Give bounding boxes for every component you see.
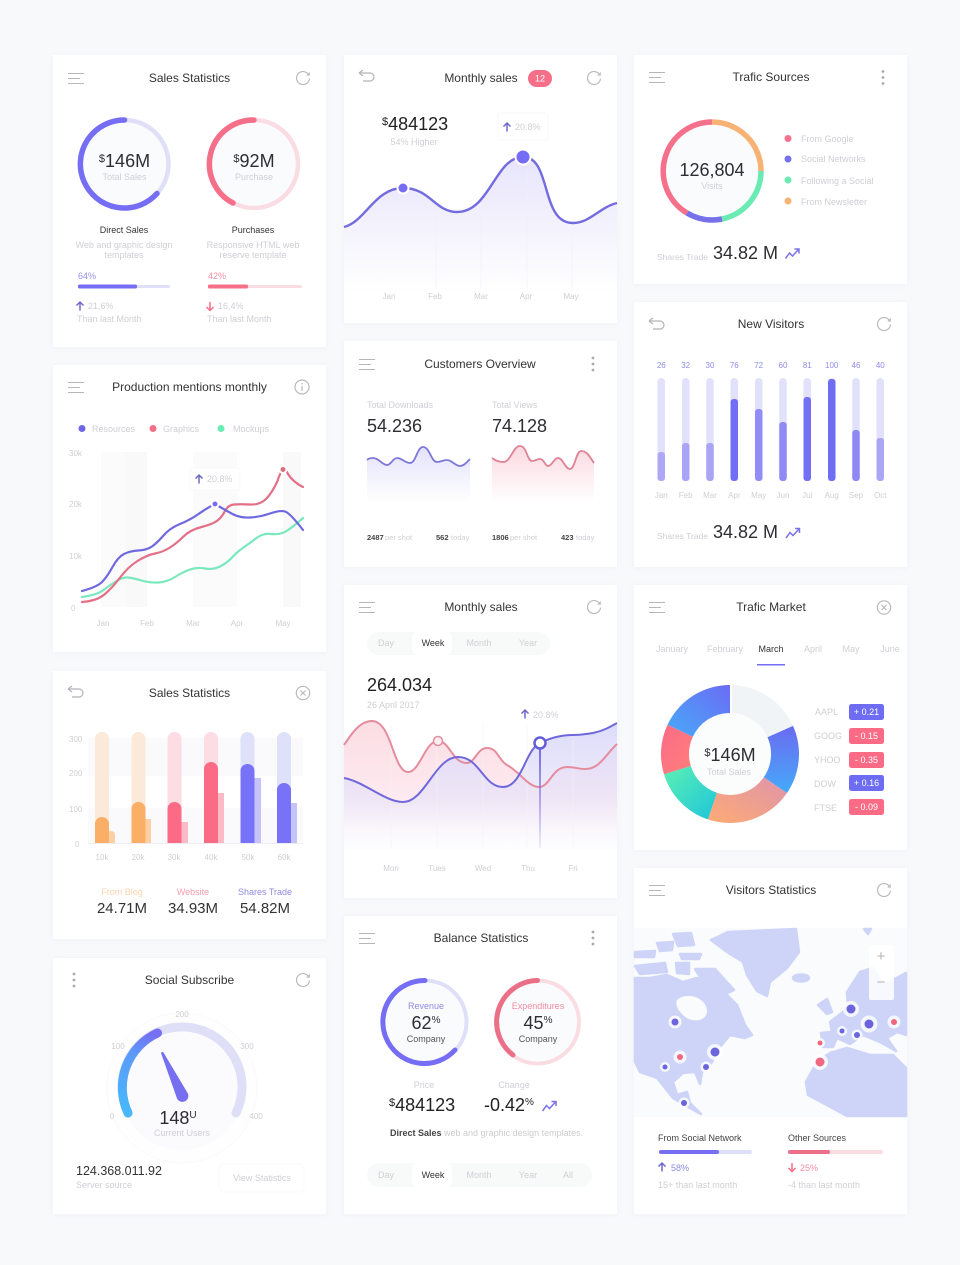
stat: other sources: 25% — [800, 1163, 818, 1173]
tooltip — [190, 468, 240, 490]
panel: social subscribe — [53, 958, 326, 1214]
text block: direct sales: Direct Sales — [100, 225, 149, 235]
axis labels: Tues — [428, 864, 446, 873]
data point: resources — [212, 500, 218, 508]
heading: Trafic Market — [736, 600, 806, 614]
heading: New Visitors — [738, 317, 804, 331]
value labels: 40 — [876, 361, 885, 370]
month tabs: February — [707, 644, 744, 654]
badge — [528, 70, 552, 87]
tabs: Day — [378, 638, 394, 648]
stat: other sources: -4 than last month — [788, 1180, 860, 1190]
stat: website: 34.93M — [168, 900, 218, 917]
ring: purchase: $ — [233, 153, 240, 165]
stat: down 16,4%: Than last Month — [207, 314, 272, 324]
gauge: U — [189, 1110, 197, 1121]
gauge: Current Users — [154, 1128, 211, 1138]
axis labels: Feb — [140, 619, 154, 628]
button: view statistics — [219, 1164, 304, 1192]
panel: monthly sales area — [344, 55, 617, 323]
badge: 12 — [535, 74, 545, 84]
footer stats: 423 — [561, 533, 574, 542]
ring: expenditures: % — [544, 1015, 553, 1026]
icon: trend — [542, 1102, 556, 1111]
axis labels: 0 — [71, 604, 76, 613]
gauge: 300 — [240, 1042, 254, 1051]
ticker list: - 0.35 — [855, 755, 878, 765]
progress: 42% — [208, 271, 302, 288]
tabs: Month — [466, 1170, 492, 1180]
stat: other sources — [788, 1133, 883, 1190]
stat: price — [389, 1080, 455, 1115]
value labels: 30 — [706, 361, 715, 370]
icon: refresh — [878, 884, 891, 897]
tooltip: 20.8% — [533, 710, 559, 720]
icon: refresh — [297, 72, 310, 85]
axis labels — [69, 735, 291, 862]
axis labels: 30k — [69, 449, 83, 458]
axis labels: 10k — [69, 552, 83, 561]
ring: expenditures: Company — [519, 1034, 558, 1044]
legend: From Google — [801, 134, 854, 144]
ticker list: - 0.15 — [855, 731, 878, 741]
panel: trafic sources — [634, 55, 907, 284]
panel: visitors statistics — [634, 868, 907, 1214]
stat: total views: Total Views — [492, 400, 538, 410]
text block: purchases: Purchases — [232, 225, 275, 235]
axis labels: Fri — [568, 864, 578, 873]
axis labels: 20k — [69, 500, 83, 509]
stat: change: Change — [498, 1080, 530, 1090]
legend: Social Networks — [801, 154, 866, 164]
stat: total views — [492, 400, 547, 436]
total: 484123 — [388, 114, 448, 134]
ticker list: + 0.21 — [854, 707, 879, 717]
tabs: Year — [519, 638, 537, 648]
footer stats: today — [576, 533, 595, 542]
axis labels: Feb — [679, 491, 693, 500]
ticker list: FTSE — [814, 803, 837, 813]
value labels: 76 — [730, 361, 739, 370]
donut ring: Visits — [701, 181, 723, 191]
panel: new visitors — [634, 302, 907, 567]
axis labels: Aug — [825, 491, 839, 500]
heading: Sales Statistics — [149, 686, 230, 700]
heading: Sales Statistics — [149, 71, 230, 85]
total — [382, 114, 448, 147]
stat: shares trade — [238, 887, 292, 917]
area chart — [344, 721, 617, 850]
axis labels: Mar — [703, 491, 717, 500]
bar chart — [658, 378, 884, 481]
heading: Balance Statistics — [434, 931, 528, 945]
axis labels: 30k — [168, 853, 181, 862]
heading: Customers Overview — [424, 357, 536, 371]
axis labels: 40k — [205, 853, 218, 862]
donut chart — [661, 685, 799, 823]
stat: shares trade: 34.82 M — [713, 243, 778, 263]
icon: refresh — [878, 318, 891, 331]
value labels: 32 — [681, 361, 691, 370]
stat: price: $ — [389, 1097, 395, 1109]
stat: from social network — [658, 1133, 752, 1190]
stat: website: Website — [177, 887, 209, 897]
icon: menu — [359, 602, 375, 612]
text block: direct sales: templates — [104, 250, 144, 260]
chart stripes — [101, 452, 301, 607]
stat: up 21,6%: 21,6% — [88, 301, 114, 311]
needle — [161, 1052, 188, 1102]
axis labels: 200 — [69, 769, 83, 778]
panel: customers overview — [344, 341, 617, 567]
icon: menu — [68, 382, 84, 392]
tabs: Week — [422, 1170, 445, 1180]
ticker list: GOOG — [814, 731, 842, 741]
icon: menu — [649, 886, 665, 896]
icon: back — [359, 70, 374, 81]
text block: direct sales — [76, 225, 172, 260]
map zoom control: + — [877, 948, 886, 965]
text block: server source: 124.368.011.92 — [76, 1164, 162, 1178]
stat: shares trade — [657, 522, 778, 542]
panel: sales statistics rings — [53, 55, 326, 347]
icon: dots — [73, 973, 75, 987]
gauge: 0 — [110, 1112, 115, 1121]
icon: dots — [882, 70, 884, 85]
progress: 64% — [78, 271, 170, 288]
stat: from social network: From Social Network — [658, 1133, 742, 1143]
footer stats: per shot — [385, 533, 413, 542]
axis labels: Thu — [521, 864, 535, 873]
icon: menu — [359, 360, 375, 370]
total: $ — [382, 116, 388, 128]
icon: menu — [68, 74, 84, 84]
panel: sales statistics bars — [53, 671, 326, 939]
stat: shares trade: 54.82M — [240, 900, 290, 917]
text block: purchases — [207, 225, 299, 260]
month tabs: April — [804, 644, 822, 654]
legend — [78, 424, 270, 434]
text block: purchases: reserve template — [219, 250, 287, 260]
ticker list — [814, 704, 884, 815]
text block: purchases: Responsive HTML web — [207, 240, 299, 250]
month tabs: January — [656, 644, 689, 654]
heading: Monthly sales — [444, 600, 518, 614]
gauge — [107, 1010, 263, 1163]
total — [367, 675, 432, 710]
panel: production mentions — [53, 365, 326, 652]
chart bands — [88, 738, 303, 843]
ring: expenditures — [496, 980, 579, 1064]
stat: down 16,4%: 16,4% — [218, 301, 244, 311]
icon: dots — [592, 931, 594, 945]
axis labels: Jul — [802, 491, 813, 500]
ring: total sales — [80, 120, 168, 208]
icon: close — [877, 601, 891, 614]
footer stats: today — [451, 533, 470, 542]
tabs: Week — [422, 638, 445, 648]
stat: total downloads: 54.236 — [367, 416, 422, 436]
icon: refresh — [297, 974, 310, 987]
stat: from social network: 58% — [671, 1163, 689, 1173]
legend: From Newsletter — [801, 197, 867, 207]
stat: change: % — [525, 1097, 534, 1108]
donut chart: $ — [704, 747, 711, 759]
month tabs — [656, 644, 900, 666]
button: view statistics: View Statistics — [233, 1173, 291, 1183]
axis labels: Mon — [383, 864, 399, 873]
heading: Trafic Sources — [733, 70, 809, 84]
ticker list: + 0.16 — [854, 778, 879, 788]
stat: total downloads — [367, 400, 434, 436]
tabs: Month — [466, 638, 492, 648]
stat: total downloads: Total Downloads — [367, 400, 434, 410]
stat: down 16,4% — [206, 301, 272, 324]
map markers: red — [674, 1016, 900, 1070]
ticker list: DOW — [814, 779, 836, 789]
month tabs: June — [880, 644, 900, 654]
icon: refresh — [588, 72, 601, 85]
axis labels: Jan — [383, 292, 395, 301]
description: Direct Sales web and graphic design templates. — [390, 1128, 583, 1138]
axis labels: 300 — [69, 735, 83, 744]
month tabs: May — [842, 644, 860, 654]
stat: price: 484123 — [395, 1095, 455, 1115]
value labels: 72 — [754, 361, 764, 370]
icon: refresh — [588, 601, 601, 614]
axis labels: 100 — [69, 805, 83, 814]
axis labels: Apr — [520, 292, 533, 301]
value labels: 100 — [825, 361, 839, 370]
axis labels: Jun — [777, 491, 789, 500]
ticker list: AAPL — [815, 707, 838, 717]
footer stats — [367, 533, 595, 542]
stat: up 21,6%: Than last Month — [77, 314, 142, 324]
donut ring — [663, 122, 761, 220]
bar chart — [88, 732, 303, 844]
axis labels: Jan — [655, 491, 668, 500]
heading: Visitors Statistics — [726, 883, 816, 897]
icon: close — [296, 686, 310, 700]
map zoom control: − — [877, 974, 886, 991]
legend — [784, 134, 874, 207]
ticker list: - 0.09 — [855, 802, 878, 812]
stat: from blog: From Blog — [101, 887, 143, 897]
stat: other sources: Other Sources — [788, 1133, 847, 1143]
legend: Graphics — [163, 424, 200, 434]
text block: direct sales: Web and graphic design — [76, 240, 172, 250]
total: 26 April 2017 — [367, 700, 420, 710]
axis labels: May — [563, 292, 579, 301]
sparkline: downloads — [367, 447, 470, 502]
value labels: 46 — [852, 361, 861, 370]
axis labels: Apr — [728, 491, 741, 500]
axis labels: Wed — [475, 864, 491, 873]
axis labels: Feb — [428, 292, 442, 301]
footer stats: 2487 — [367, 533, 384, 542]
tabs: Day — [378, 1170, 394, 1180]
axis labels: Mar — [186, 619, 200, 628]
ring: purchase — [209, 120, 298, 208]
stat: price: Price — [414, 1080, 434, 1090]
axis labels: 20k — [132, 853, 145, 862]
map markers: purple — [660, 1001, 878, 1108]
axis labels: 60k — [278, 853, 291, 862]
legend: Mockups — [233, 424, 270, 434]
line chart — [82, 470, 303, 602]
icon: dots — [592, 357, 594, 371]
value labels — [657, 361, 885, 370]
heading: Social Subscribe — [145, 973, 235, 987]
gauge: 148 — [159, 1108, 189, 1128]
icon: menu — [359, 934, 375, 944]
month tabs: March — [758, 644, 784, 654]
text block: server source — [76, 1164, 162, 1190]
donut ring: 126,804 — [679, 160, 745, 180]
text block: server source: Server source — [76, 1180, 132, 1190]
stat: shares trade — [657, 243, 778, 263]
panel: trafic market — [634, 585, 907, 850]
stat: from blog — [97, 887, 147, 917]
donut chart: 146M — [711, 745, 756, 765]
gauge: 400 — [249, 1112, 263, 1121]
progress: 64%: 64% — [78, 271, 96, 281]
axis labels: Jan — [97, 619, 109, 628]
ring: revenue: Revenue — [408, 1001, 444, 1011]
icon: menu — [649, 602, 665, 612]
stat: from social network: 15+ than last month — [658, 1180, 737, 1190]
tooltip — [498, 113, 548, 140]
icon: info — [295, 380, 309, 394]
heading: Monthly sales — [444, 71, 518, 85]
axis labels: May — [751, 491, 766, 500]
legend: Resources — [92, 424, 136, 434]
world map — [634, 928, 907, 1117]
axis labels: Oct — [874, 491, 887, 500]
axis labels: Apr — [231, 619, 244, 628]
stat: total views: 74.128 — [492, 416, 547, 436]
stat: shares trade: Shares Trade — [238, 887, 292, 897]
tooltip — [522, 710, 559, 720]
axis labels — [383, 292, 579, 301]
icon: back — [649, 318, 664, 329]
donut chart: Total Sales — [707, 767, 752, 777]
axis labels: 50k — [242, 853, 255, 862]
icon: menu — [649, 72, 665, 82]
heading: Production mentions monthly — [112, 380, 267, 394]
ring: purchase: Purchase — [235, 172, 273, 182]
panel: balance statistics — [344, 916, 617, 1214]
tabs: All — [563, 1170, 573, 1180]
total: 264.034 — [367, 675, 432, 695]
stat: shares trade: Shares Trade — [657, 531, 708, 541]
axis labels: Mar — [474, 292, 488, 301]
ring: purchase: 92M — [240, 151, 275, 171]
icon: trend — [786, 528, 800, 538]
ring: expenditures: 45 — [524, 1013, 544, 1033]
gauge: 100 — [111, 1042, 125, 1051]
stat: change — [484, 1080, 534, 1115]
stat: shares trade: 34.82 M — [713, 522, 778, 542]
footer stats: 1806 — [492, 533, 509, 542]
axis labels — [383, 864, 578, 873]
footer stats: per shot — [510, 533, 538, 542]
icon: trend — [786, 249, 799, 258]
data point: graphics — [280, 466, 286, 473]
value labels: 26 — [657, 361, 666, 370]
axis labels: 0 — [75, 840, 80, 849]
icon: back — [68, 686, 83, 697]
legend: Following a Social — [801, 176, 874, 186]
ring: total sales: $ — [99, 153, 105, 165]
map zoom control — [869, 945, 894, 1000]
ring: expenditures: Expenditures — [512, 1001, 565, 1011]
ring: revenue: % — [432, 1015, 441, 1026]
value labels: 60 — [779, 361, 788, 370]
tabs — [367, 632, 550, 655]
stat: from blog: 24.71M — [97, 900, 147, 917]
value labels: 81 — [803, 361, 812, 370]
stat: change: -0.42 — [484, 1095, 525, 1115]
axis labels: May — [275, 619, 291, 628]
ring: revenue — [383, 980, 466, 1064]
area chart — [344, 150, 617, 292]
footer stats: 562 — [436, 533, 449, 542]
progress: 42%: 42% — [208, 271, 226, 281]
ring: revenue: 62 — [412, 1013, 432, 1033]
stat: shares trade: Shares Trade — [657, 252, 708, 262]
axis labels: Sep — [849, 491, 864, 500]
axis labels — [655, 491, 887, 500]
panel: monthly sales weekly — [344, 585, 617, 898]
stat: up 21,6% — [76, 301, 142, 324]
stat: website — [168, 887, 218, 917]
gauge: 200 — [175, 1010, 189, 1019]
tabs: Year — [519, 1170, 537, 1180]
tooltip: 20.8% — [207, 474, 233, 484]
sparkline: views — [492, 446, 594, 502]
ring: total sales: 146M — [105, 151, 150, 171]
axis labels: 10k — [96, 853, 109, 862]
ticker list: YHOO — [814, 755, 841, 765]
axis labels — [69, 449, 291, 628]
total: 54% Higher — [390, 137, 438, 147]
tooltip: 20.8% — [515, 122, 541, 132]
tabs — [367, 1163, 592, 1187]
ring: revenue: Company — [407, 1034, 446, 1044]
ring: total sales: Total Sales — [102, 172, 147, 182]
